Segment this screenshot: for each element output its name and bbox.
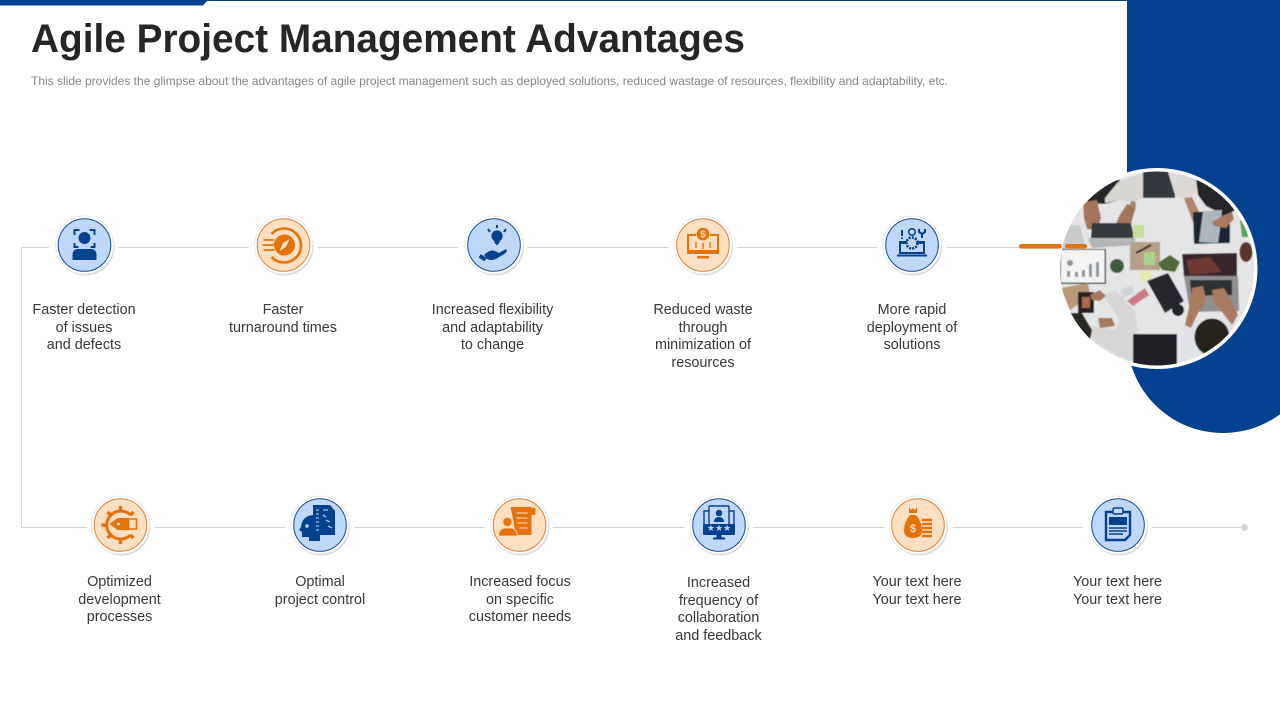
orange progress marker	[1019, 244, 1087, 249]
text: flexibility: and adaptability	[442, 320, 544, 336]
text: project control: Optimal	[295, 574, 345, 590]
text: optimized development: Optimized	[87, 574, 152, 590]
step 7: project control	[275, 496, 365, 608]
icon: person with scroll	[490, 496, 550, 556]
text: faster detection: and defects	[47, 337, 121, 353]
text: reduced waste: through	[679, 320, 727, 336]
step 6: optimized development	[78, 496, 161, 625]
icon: monitor with rating stars: ★★★	[707, 523, 731, 533]
text: faster turnaround: Faster	[263, 302, 304, 318]
icon: gear with pencil	[92, 496, 150, 556]
icon: clipboard	[1089, 496, 1148, 556]
step 1: faster detection	[32, 216, 136, 353]
icon: hand with bulb	[465, 216, 524, 276]
text: placeholder: Your text here	[872, 574, 962, 590]
text: placeholder: Your text here	[1073, 574, 1162, 590]
step 4: reduced waste	[653, 216, 753, 371]
icon: laptop with gear and tools	[883, 216, 942, 276]
icon: speed compass	[254, 216, 314, 276]
text: flexibility: to change	[461, 337, 524, 353]
text: faster turnaround: turnaround times	[229, 320, 337, 336]
step 2: faster turnaround	[229, 216, 337, 336]
text: customer focus: Increased focus	[469, 574, 571, 590]
text: collaboration: and feedback	[675, 628, 763, 644]
connector lines	[22, 248, 1244, 528]
text: customer focus: customer needs	[469, 609, 571, 625]
icon: face scan	[56, 216, 114, 276]
icon: head with document	[291, 496, 350, 556]
step 11: placeholder	[1073, 496, 1162, 608]
text: optimized development: processes	[87, 609, 152, 625]
text: faster detection: of issues	[56, 320, 112, 336]
icon: monitor with coin	[674, 216, 733, 276]
text: rapid deployment: deployment of	[867, 320, 958, 336]
step 10: placeholder	[872, 496, 962, 608]
title: Agile Project Management Advantages	[31, 17, 745, 61]
text: customer focus: on specific	[486, 592, 554, 608]
text: optimized development: development	[78, 592, 161, 608]
text: project control: project control	[275, 592, 365, 608]
text: rapid deployment: More rapid	[878, 302, 946, 318]
text: collaboration: Increased	[687, 575, 750, 591]
icon: money bag and coins: $	[910, 523, 916, 535]
text: flexibility: Increased flexibility	[432, 302, 554, 318]
end dot	[1241, 524, 1248, 531]
subtitle: This slide provides the glimpse about the advantages of agile project management such as deployed solutions, reduced wastage of resources, flexibility and adaptability, etc.	[31, 74, 948, 88]
step 8: customer focus	[469, 496, 571, 625]
step 9: collaboration	[675, 496, 763, 644]
icon: monitor with rating stars	[690, 496, 749, 556]
text: collaboration: collaboration	[678, 610, 759, 626]
text: reduced waste: resources	[671, 355, 735, 371]
text: faster detection: Faster detection	[32, 302, 136, 318]
text: placeholder: Your text here	[1073, 592, 1162, 608]
text: reduced waste: Reduced waste	[653, 302, 753, 318]
top accent bar	[0, 0, 1127, 6]
text: placeholder: Your text here	[872, 592, 962, 608]
text: collaboration: frequency of	[679, 593, 759, 609]
step 3: flexibility	[432, 216, 554, 353]
text: rapid deployment: solutions	[884, 337, 940, 353]
icon: monitor with coin: $	[700, 230, 706, 240]
step 5: rapid deployment	[867, 216, 958, 353]
text: reduced waste: minimization of	[655, 337, 752, 353]
photo: team around a table	[1055, 165, 1260, 375]
blue corner shape	[1127, 0, 1280, 433]
